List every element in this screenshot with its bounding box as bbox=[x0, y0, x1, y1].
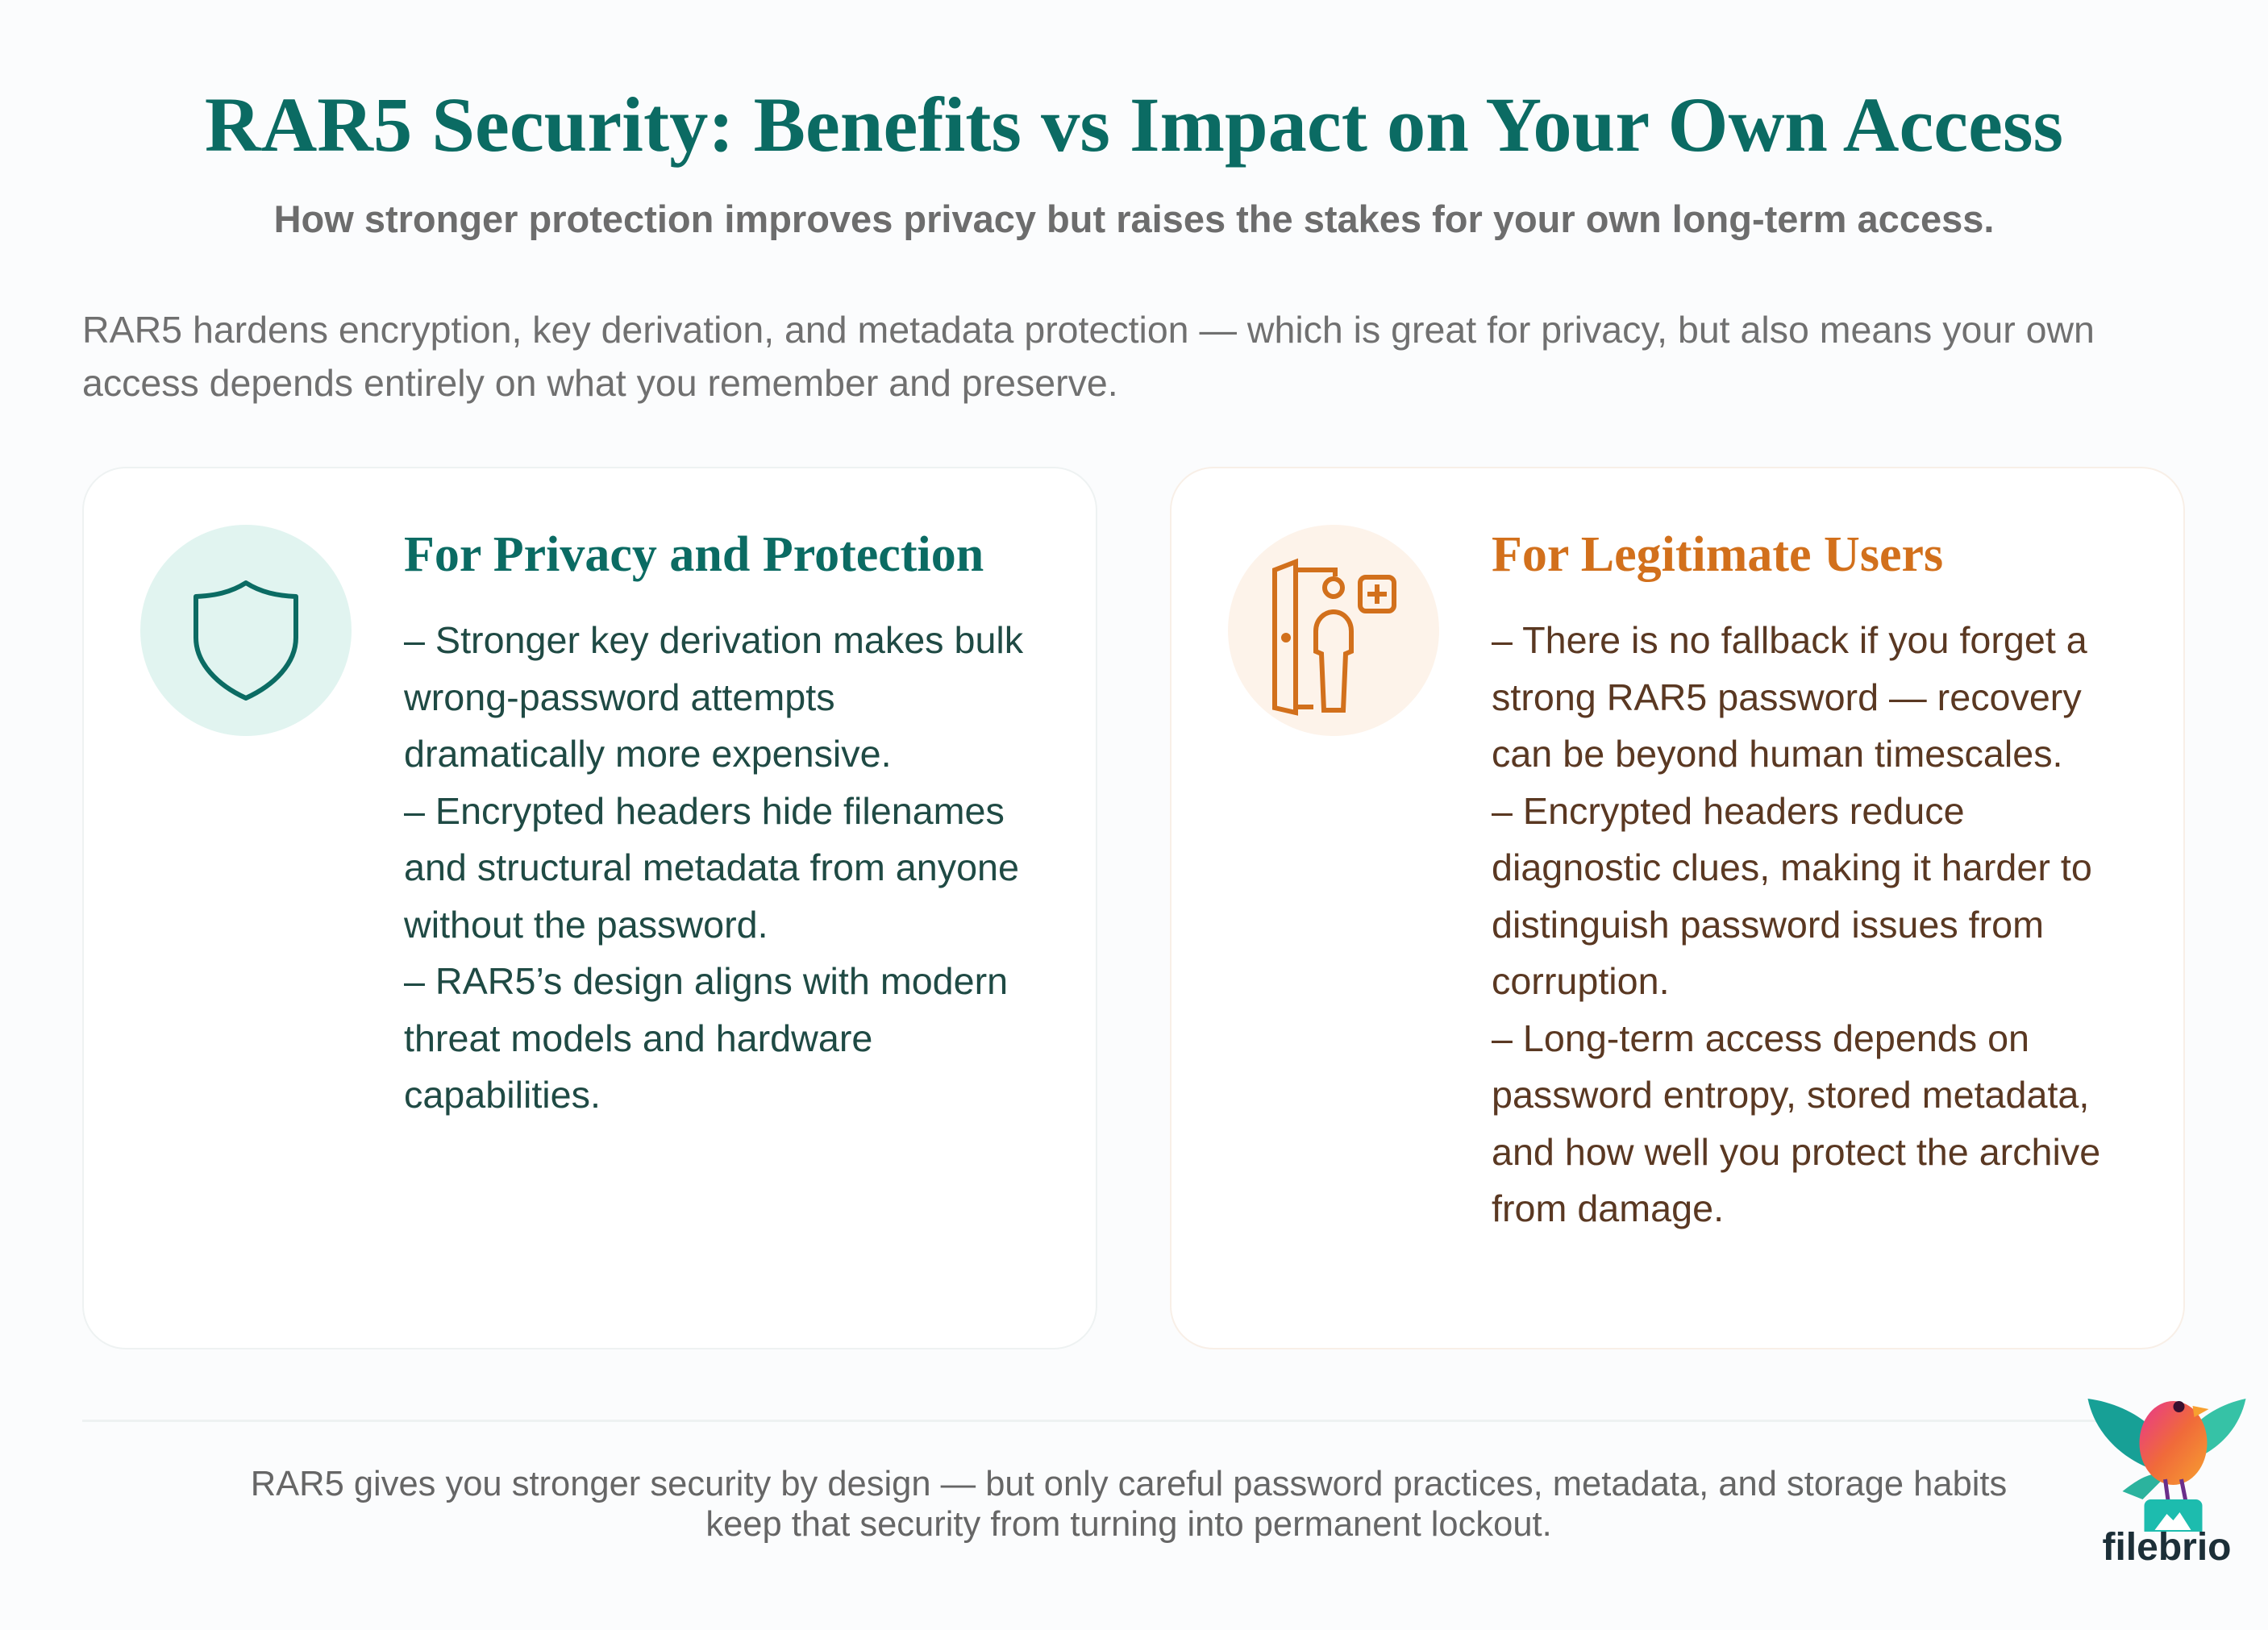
panel: privacy bbox=[82, 467, 1097, 1349]
logo: filebrio: filebrio bbox=[2102, 1526, 2232, 1569]
bullets: legitimate users: – There is no fallback if you forget a strong RAR5 password — recovery can be beyond human timescales. bbox=[1492, 619, 2087, 775]
bullets: privacy bbox=[404, 619, 1024, 1116]
subtitle: How stronger protection improves privacy but raises the stakes for your own long-term access. bbox=[274, 198, 1994, 240]
bullets: legitimate users bbox=[1492, 619, 2100, 1229]
panel: legitimate users bbox=[1170, 467, 2185, 1349]
bullets: legitimate users: – Long-term access depends on password entropy, stored metadata, and how well you protect the archive from damage. bbox=[1492, 1017, 2100, 1229]
bullets: legitimate users: – Encrypted headers reduce diagnostic clues, making it harder to distinguish password issues from corruption. bbox=[1492, 790, 2092, 1002]
bullets: privacy: – RAR5’s design aligns with modern threat models and hardware capabilities. bbox=[404, 960, 1008, 1116]
bullets: privacy: – Encrypted headers hide filenames and structural metadata from anyone without the password. bbox=[404, 790, 1019, 945]
title: RAR5 Security: Benefits vs Impact on Your Own Access bbox=[205, 81, 2063, 168]
footer text bbox=[251, 1465, 2007, 1544]
footer text: RAR5 gives you stronger security by design — but only careful password practices, metadata, and storage habits bbox=[251, 1465, 2007, 1503]
icon: door and person bbox=[1228, 525, 1439, 736]
bullets: privacy: – Stronger key derivation makes bulk wrong-password attempts dramatically more expensive. bbox=[404, 619, 1023, 775]
heading: legitimate users: For Legitimate Users bbox=[1492, 527, 1943, 582]
intro text: RAR5 hardens encryption, key derivation, and metadata protection — which is great for privacy, but also means your own access depends entirely on what you remember and preserve. bbox=[82, 309, 2095, 404]
heading: privacy: For Privacy and Protection bbox=[404, 527, 984, 582]
footer text: keep that security from turning into permanent lockout. bbox=[705, 1505, 1552, 1544]
icon: shield bbox=[140, 525, 352, 736]
logo: filebrio bbox=[2088, 1399, 2246, 1569]
